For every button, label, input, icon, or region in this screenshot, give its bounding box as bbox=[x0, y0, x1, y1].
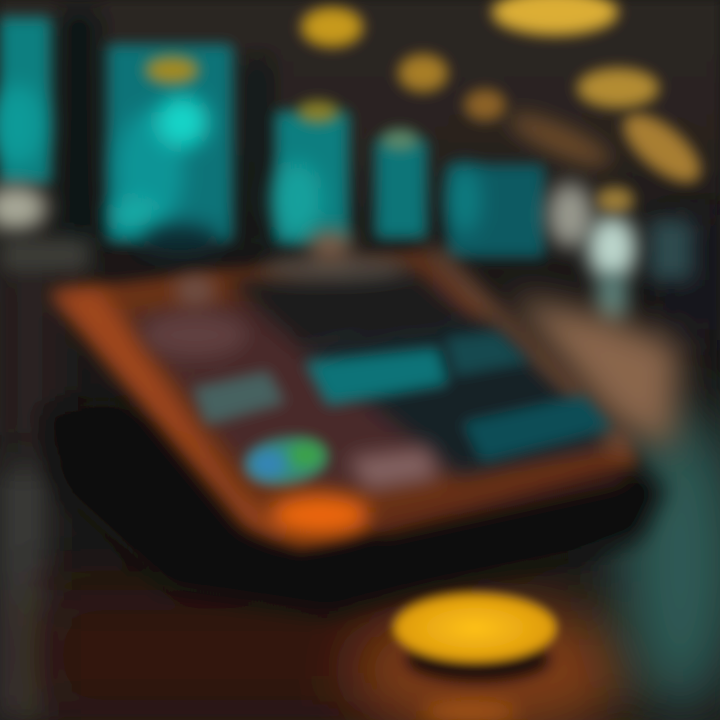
orange glow at phone bottom bbox=[270, 495, 370, 535]
panel: distant teal bbox=[448, 165, 544, 257]
dark top bar bbox=[225, 265, 490, 345]
orange left edge bbox=[52, 288, 295, 545]
ceiling lights bbox=[302, 0, 710, 193]
grey-teal button bbox=[193, 371, 285, 425]
light: top wide bbox=[493, 0, 617, 34]
panel: narrow teal bbox=[376, 130, 426, 238]
light: round 2 bbox=[399, 55, 447, 91]
teal pill 1 bbox=[305, 348, 448, 405]
dark lower panel bbox=[300, 320, 615, 475]
light: right top bbox=[578, 69, 658, 107]
right side pale reflections bbox=[510, 183, 692, 450]
panel: far left teal bbox=[0, 18, 50, 183]
yellow disc on table bbox=[395, 595, 555, 720]
teal pill 2 bbox=[445, 332, 530, 376]
right rim highlight bbox=[418, 248, 635, 458]
panel: centre teal bbox=[274, 102, 348, 242]
phone bbox=[40, 230, 665, 615]
left edge pale highlight bbox=[0, 186, 46, 230]
app icon: green and blue bbox=[243, 434, 329, 488]
light: streak between bbox=[504, 105, 616, 175]
teal pill 3 bbox=[462, 395, 614, 462]
pale pink button bbox=[348, 447, 438, 490]
phone screen inner bbox=[120, 278, 610, 490]
phone screen frame bbox=[50, 252, 640, 550]
phone body bbox=[40, 400, 665, 615]
panel: main teal bbox=[108, 45, 232, 256]
faint pale blocks bbox=[143, 313, 247, 357]
light: right streak bbox=[614, 103, 710, 193]
teal window panels bbox=[0, 18, 544, 272]
light: round 3 bbox=[465, 90, 505, 120]
light: round 1 bbox=[302, 8, 362, 46]
